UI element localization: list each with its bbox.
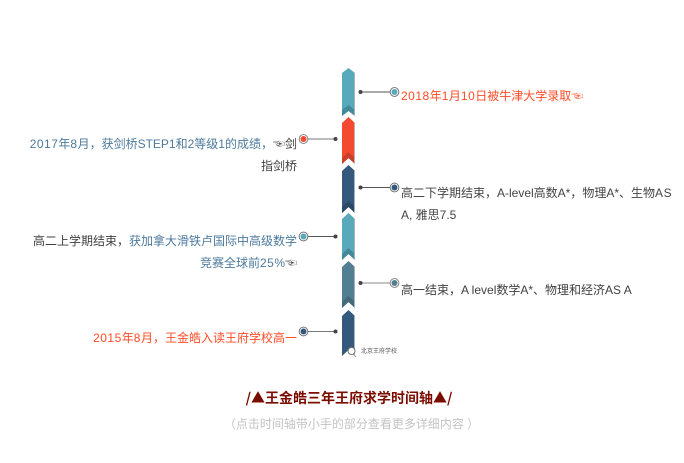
title: /▲王金皓三年王府求学时间轴▲/ bbox=[246, 388, 452, 408]
event grade 11 first term bbox=[33, 234, 297, 270]
event grade 11 second term: A, 雅思7.5 bbox=[401, 208, 456, 222]
event grade 10: 高一结束，A level数学A*、物理和经济AS A bbox=[401, 283, 632, 297]
connector and node grade 10 bbox=[358, 279, 399, 287]
connector and node 2018 bbox=[358, 88, 399, 96]
connector and node 2017 bbox=[299, 135, 338, 143]
watermark icon bbox=[348, 348, 356, 357]
event grade 11 first term: 竞赛全球前25%☜ bbox=[200, 256, 297, 270]
timeline segment 6 navy bbox=[342, 310, 355, 356]
event 2017: 2017年8月，获剑桥STEP1和2等级1的成绩，☜剑 bbox=[30, 137, 297, 151]
timeline segment 1 teal bbox=[342, 68, 355, 116]
event grade 11 first term: 高二上学期结束，获加拿大滑铁卢国际中高级数学 bbox=[33, 234, 297, 248]
event 2018: 2018年1月10日被牛津大学录取☜ bbox=[401, 89, 583, 103]
timeline segment 4 teal bbox=[342, 213, 355, 260]
connector and node grade 11 first term bbox=[299, 232, 338, 241]
timeline segment 5 slate bbox=[342, 261, 355, 308]
connector and node grade 11 second term bbox=[358, 183, 399, 192]
timeline segment 2 red bbox=[342, 117, 355, 164]
event grade 11 second term bbox=[401, 186, 672, 222]
event 2015: 2015年8月，王金皓入读王府学校高一 bbox=[93, 331, 297, 345]
subtitle: （点击时间轴带小手的部分查看更多详细内容 ） bbox=[224, 417, 479, 431]
connector and node 2015 bbox=[299, 327, 338, 336]
watermark text: 北京王府学校 bbox=[361, 349, 397, 355]
event 2017 bbox=[30, 137, 297, 173]
event grade 11 second term: 高二下学期结束，A-level高数A*，物理A*、生物AS bbox=[401, 186, 672, 200]
event 2017: 指剑桥 bbox=[261, 159, 297, 173]
timeline segment 3 navy bbox=[342, 165, 355, 213]
